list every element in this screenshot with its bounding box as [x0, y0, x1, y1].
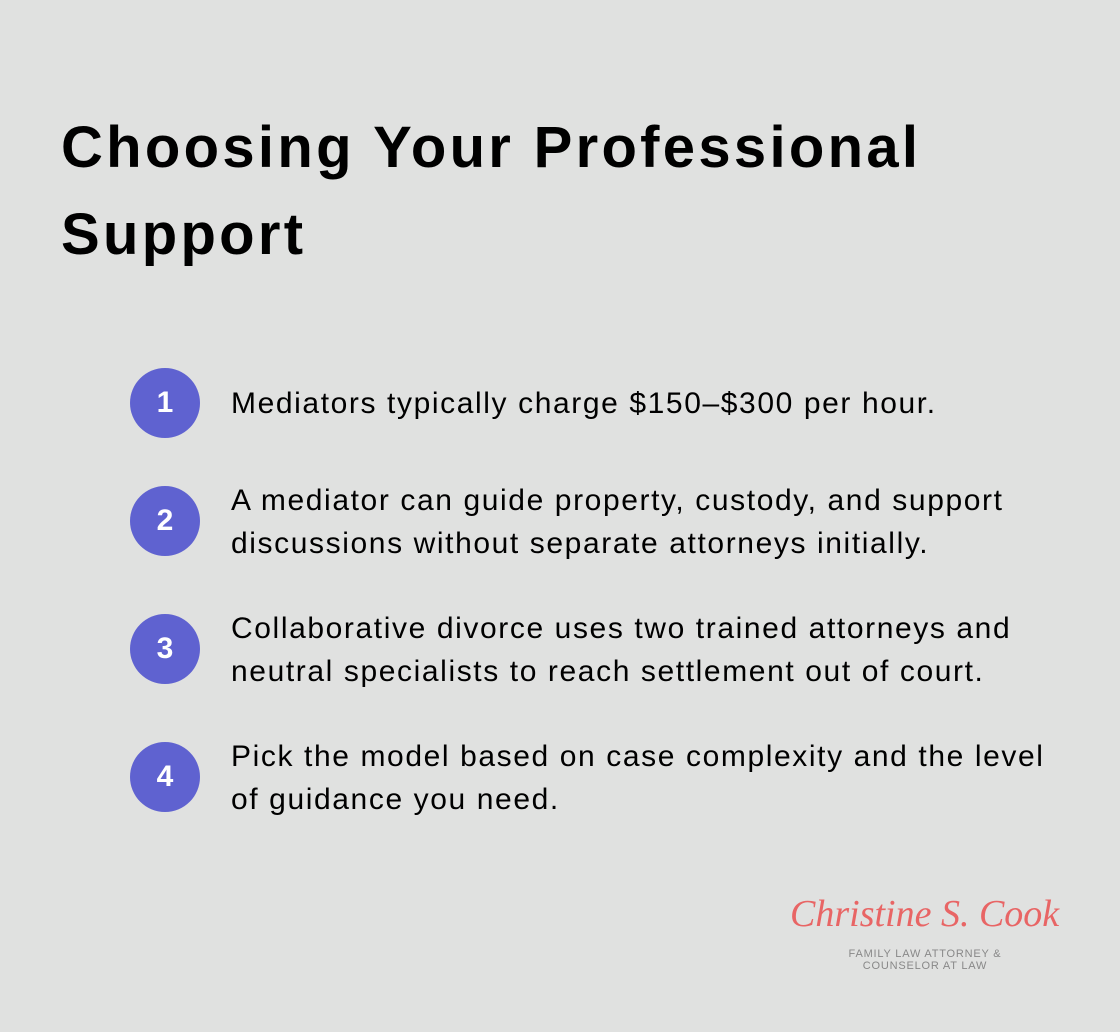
text 3: neutral specialists to reach settlement out of court.: [231, 655, 984, 688]
icon: number 3: [130, 614, 200, 684]
icon: number 1: 1: [157, 386, 173, 419]
item 1: [130, 368, 937, 438]
text 2: A mediator can guide property, custody, and support: [231, 484, 1004, 517]
title: [61, 115, 921, 267]
icon: number 1: [130, 368, 200, 438]
item 2: [130, 484, 1004, 560]
text 2: [231, 484, 1004, 560]
icon: number 2: [130, 486, 200, 556]
text 2: discussions without separate attorneys initially.: [231, 527, 929, 560]
logo: FAMILY LAW ATTORNEY &: [849, 948, 1001, 960]
logo: COUNSELOR AT LAW: [863, 960, 987, 972]
title: Choosing Your Professional: [61, 115, 921, 180]
logo: [790, 893, 1060, 972]
icon: number 4: [130, 742, 200, 812]
text 4: of guidance you need.: [231, 783, 560, 816]
logo: Christine S. Cook: [790, 893, 1059, 935]
text 4: Pick the model based on case complexity and the level: [231, 740, 1045, 773]
icon: number 4: 4: [157, 760, 173, 793]
text 3: Collaborative divorce uses two trained attorneys and: [231, 612, 1011, 645]
text 1: Mediators typically charge $150–$300 per hour.: [231, 387, 937, 420]
item 4: [130, 740, 1045, 816]
item 3: [130, 612, 1011, 688]
icon: number 3: 3: [157, 632, 173, 665]
text 3: [231, 612, 1011, 688]
icon: number 2: 2: [157, 504, 173, 537]
text 4: [231, 740, 1045, 816]
title: Support: [61, 202, 306, 267]
